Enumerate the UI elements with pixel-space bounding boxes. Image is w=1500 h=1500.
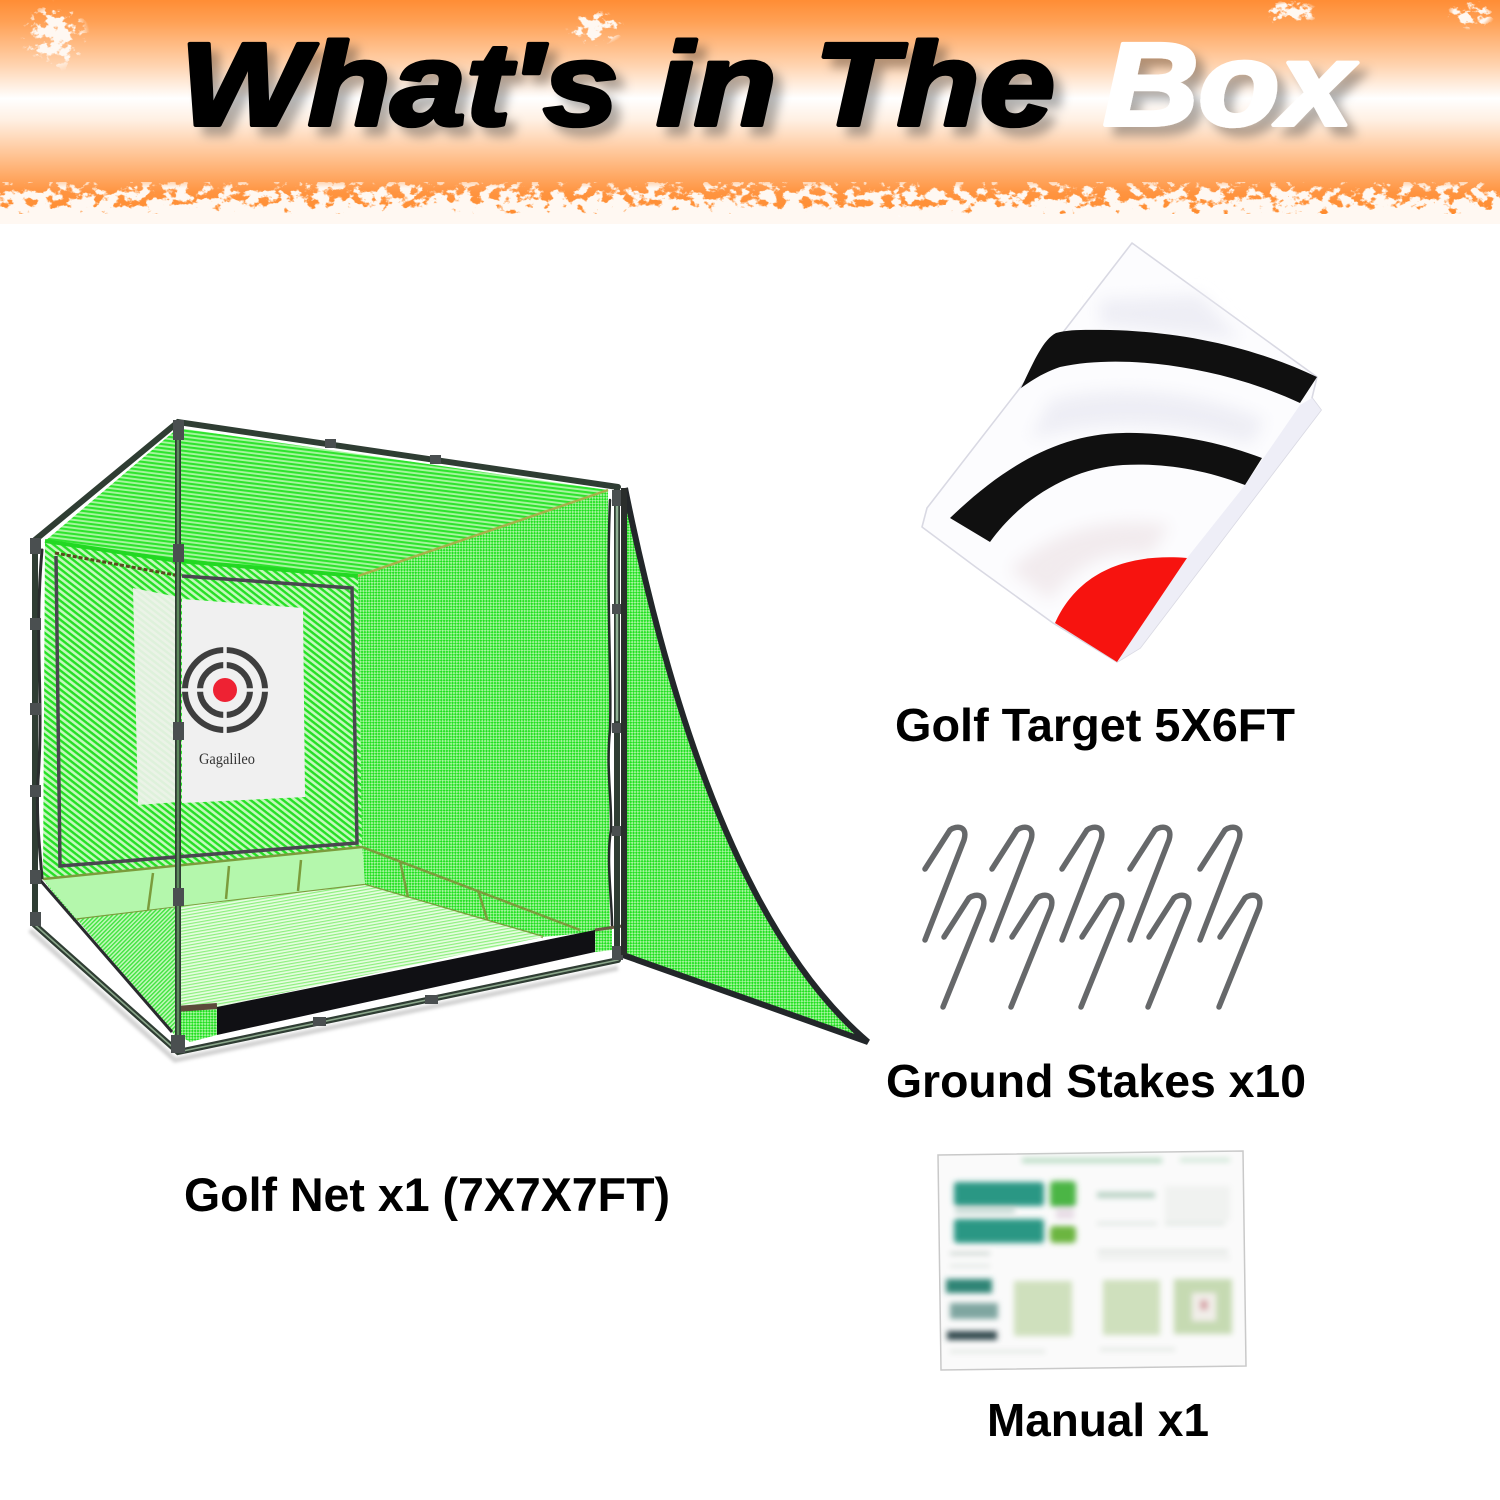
- target bullseye: [213, 678, 237, 702]
- frame joints: [30, 420, 623, 1053]
- grunge speckles: [20, 0, 1495, 72]
- frame poles: [35, 422, 618, 1052]
- product: ground stakes: [925, 827, 1260, 1007]
- fabric side fold: [1117, 398, 1321, 662]
- title: What's in The: [180, 19, 1055, 151]
- grunge bottom edge: [0, 182, 1500, 224]
- target sheet: [133, 588, 305, 805]
- top black arc: [1021, 330, 1317, 403]
- front floor corner net: [180, 1007, 217, 1042]
- front left floor net: [43, 879, 178, 1040]
- product: golf net: [30, 420, 868, 1060]
- product: manual: [938, 1151, 1246, 1370]
- bottom row stakes: [943, 895, 1260, 1007]
- fabric shading: [1010, 295, 1265, 600]
- blurred manual content: [946, 1158, 1232, 1353]
- header banner: [0, 0, 1500, 224]
- brown bar: [176, 1006, 217, 1009]
- manual sheet: [938, 1151, 1246, 1370]
- target fabric: [922, 243, 1321, 662]
- middle black arc: [950, 433, 1262, 542]
- target rings: [179, 644, 271, 736]
- black ground band: [217, 930, 595, 1035]
- title: Box: [1103, 19, 1358, 151]
- ceiling net: [45, 428, 608, 576]
- flap mast: [621, 488, 627, 955]
- ceiling right seam: [358, 490, 608, 576]
- ceiling front green seam: [45, 541, 358, 576]
- label: golf net: Golf Net x1 (7X7X7FT): [184, 1168, 670, 1221]
- target brand: Gagalileo: [199, 751, 255, 768]
- label: golf target: Golf Target 5X6FT: [895, 699, 1295, 751]
- label: manual: Manual x1: [987, 1394, 1209, 1446]
- title: [180, 19, 1358, 151]
- back wall net: [43, 541, 363, 879]
- floor net: [178, 885, 543, 1010]
- product: folded golf target: [922, 243, 1321, 662]
- low barrier net: [43, 847, 580, 937]
- left low guide rope: [40, 880, 172, 1032]
- back wall inner frame: [56, 556, 357, 866]
- hanging strap: [55, 553, 175, 575]
- top row stakes: [925, 827, 1240, 940]
- right side flap net: [623, 488, 868, 1042]
- net floor shadow: [30, 930, 618, 1060]
- right wall net: [358, 490, 610, 945]
- red centre: [1055, 557, 1187, 662]
- right band tab: [595, 926, 622, 930]
- label: ground stakes: Ground Stakes x10: [886, 1055, 1306, 1107]
- right band corner net: [595, 926, 612, 952]
